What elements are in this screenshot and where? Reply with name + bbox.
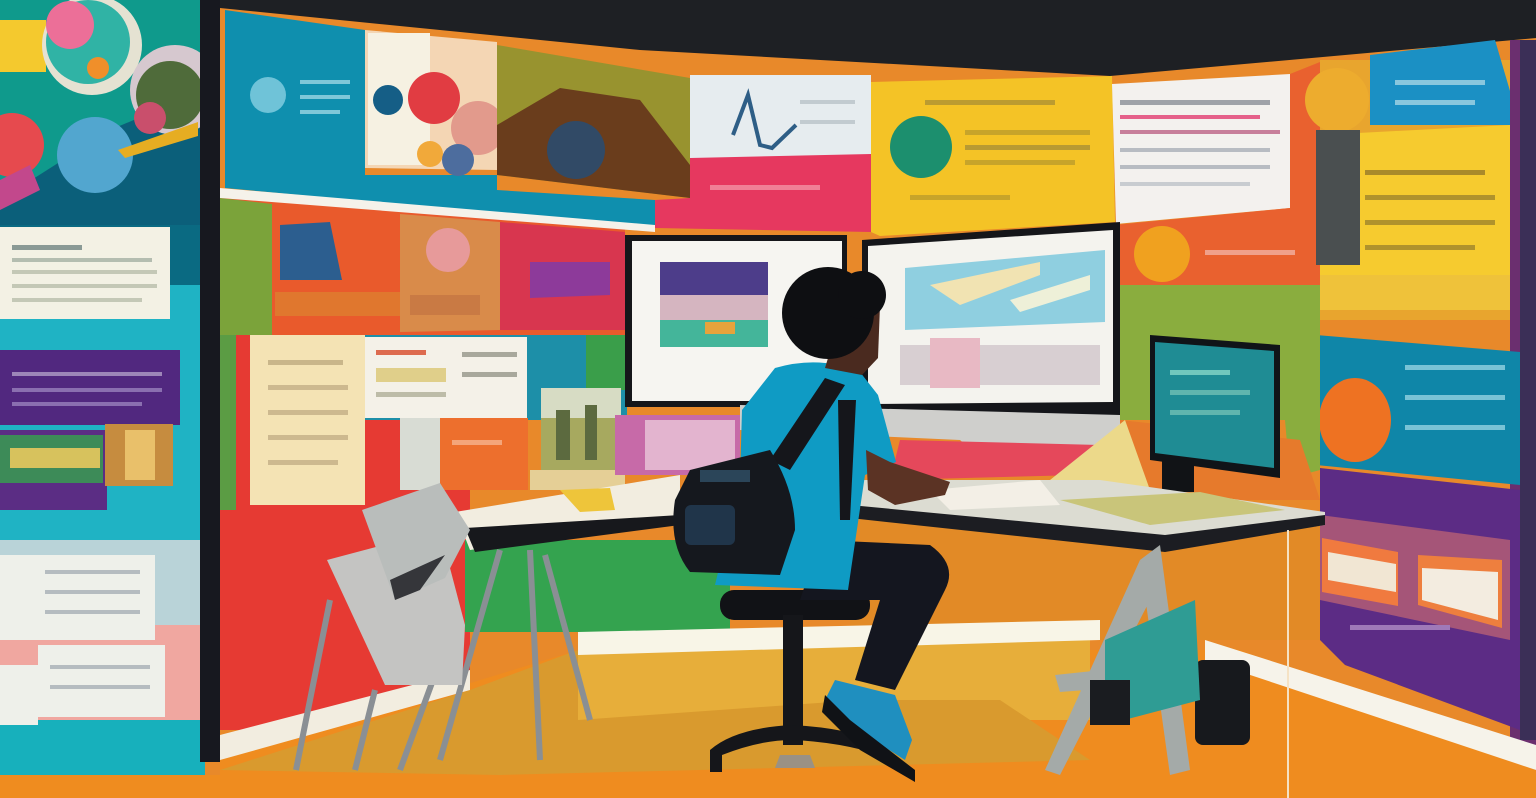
- orange card: [400, 418, 528, 490]
- shirt: [715, 362, 896, 590]
- neck and face: [825, 305, 880, 375]
- landscape photo: [0, 424, 173, 510]
- panel: left wall: [0, 0, 220, 775]
- panel: lower-left posters: [220, 335, 740, 730]
- lower wall orange: [850, 515, 1330, 640]
- panel: top-row posters: [225, 10, 1320, 285]
- desk: [455, 475, 1325, 552]
- circles cluster: [0, 0, 220, 210]
- desk legs, right: [1045, 545, 1190, 775]
- purple banner: [0, 350, 180, 425]
- photo of trees: [541, 388, 621, 470]
- right-side purple panel: [1320, 468, 1520, 730]
- panel: top-right posters: [1305, 40, 1536, 798]
- lower wall green: [465, 540, 730, 632]
- poster: teal magnifier: [225, 10, 655, 228]
- cream paper: [250, 335, 365, 505]
- desk legs and easel, left: [296, 550, 590, 770]
- arm: [866, 450, 950, 505]
- green panel behind small monitor: [1120, 285, 1320, 478]
- drawing board with paper: [327, 483, 470, 685]
- white sheet: [365, 337, 527, 418]
- bag and box on floor: [1090, 600, 1250, 745]
- person: [673, 267, 950, 782]
- poster: peach circles: [365, 30, 505, 176]
- note card: [0, 227, 170, 319]
- cable: [1287, 530, 1289, 798]
- backpack: [673, 450, 795, 575]
- pants: [800, 540, 949, 690]
- poster: line chart on pink: [655, 75, 871, 232]
- poster: white text sheet: [1112, 74, 1290, 224]
- backpack strap: [770, 378, 845, 470]
- poster: yellow with green circle: [871, 76, 1115, 236]
- cream wedge: [1050, 420, 1150, 490]
- monitor: right: [862, 222, 1120, 417]
- poster: olive landscape: [497, 45, 690, 198]
- monitor: left: [625, 235, 847, 407]
- poster: orange right: [1115, 62, 1320, 285]
- screen map: [905, 250, 1105, 330]
- screen chart: [660, 262, 768, 347]
- orange wedge right of monitors: [1120, 420, 1320, 500]
- hair: [782, 267, 886, 359]
- lower note cards: [0, 555, 165, 725]
- pink block behind desk: [890, 440, 1100, 480]
- right-side blue panel: [1316, 335, 1520, 485]
- panel: middle-row posters: [220, 188, 655, 340]
- monitor stand: [740, 405, 1120, 475]
- ceiling: [220, 0, 1536, 76]
- chair: [710, 590, 890, 772]
- monitor: small: [1150, 335, 1280, 492]
- shoe: [822, 680, 915, 782]
- pillar: [200, 0, 220, 762]
- floor: [0, 620, 1536, 798]
